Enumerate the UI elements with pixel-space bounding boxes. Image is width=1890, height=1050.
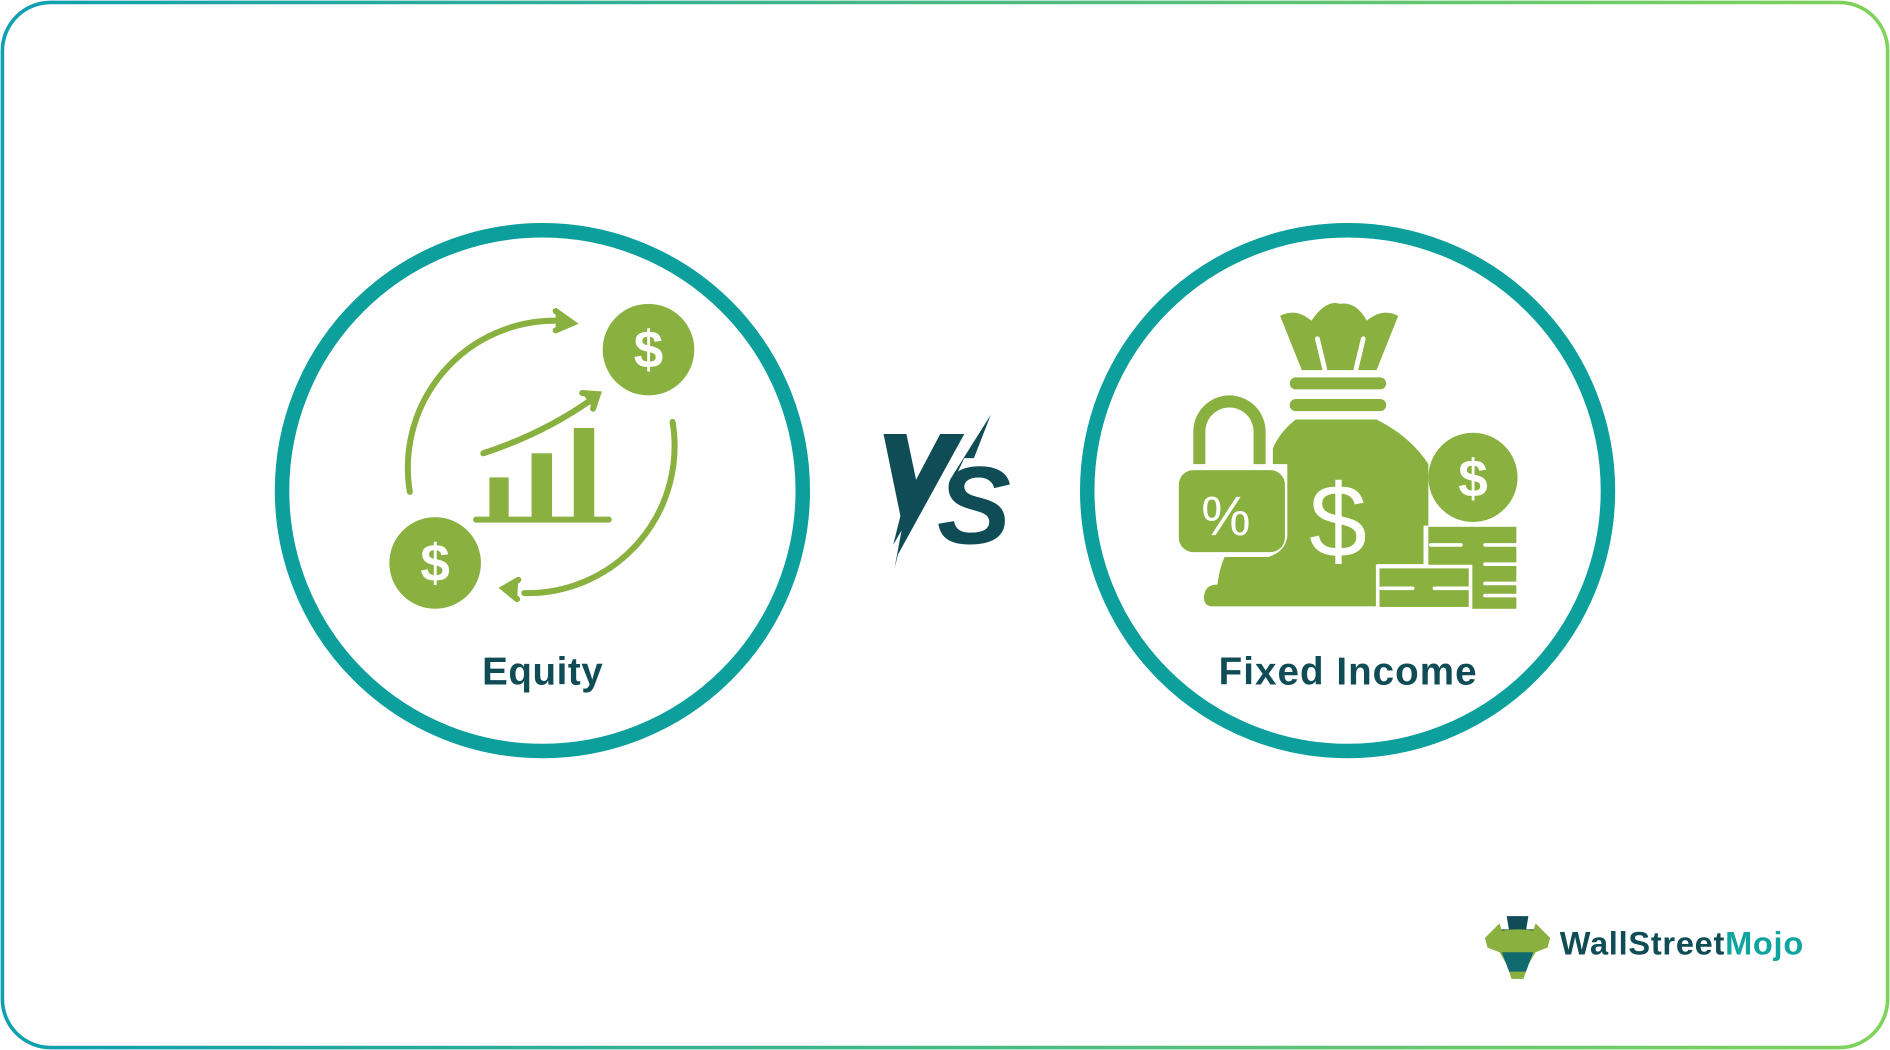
icon: coin and stacks: $ — [1458, 450, 1488, 509]
icon: money bag: $ — [1309, 463, 1367, 579]
icon: equity — [389, 304, 694, 609]
icon: lock — [1179, 395, 1285, 552]
panel: equity circle — [282, 230, 803, 751]
panel: fixed income circle — [1087, 230, 1608, 751]
icon: coin and stacks — [1378, 433, 1518, 609]
logo — [1485, 916, 1803, 979]
icon: equity: $ — [634, 321, 663, 380]
label: fixed income: Fixed Income — [1219, 651, 1477, 694]
logo: WallStreetMojo — [1560, 926, 1803, 962]
icon: lock: % — [1201, 485, 1250, 547]
label: equity: Equity — [482, 651, 603, 694]
vs mark: S — [937, 445, 1011, 568]
icon: money bag — [1204, 303, 1428, 606]
vs mark — [884, 415, 1011, 569]
icon: equity: $ — [420, 534, 450, 593]
